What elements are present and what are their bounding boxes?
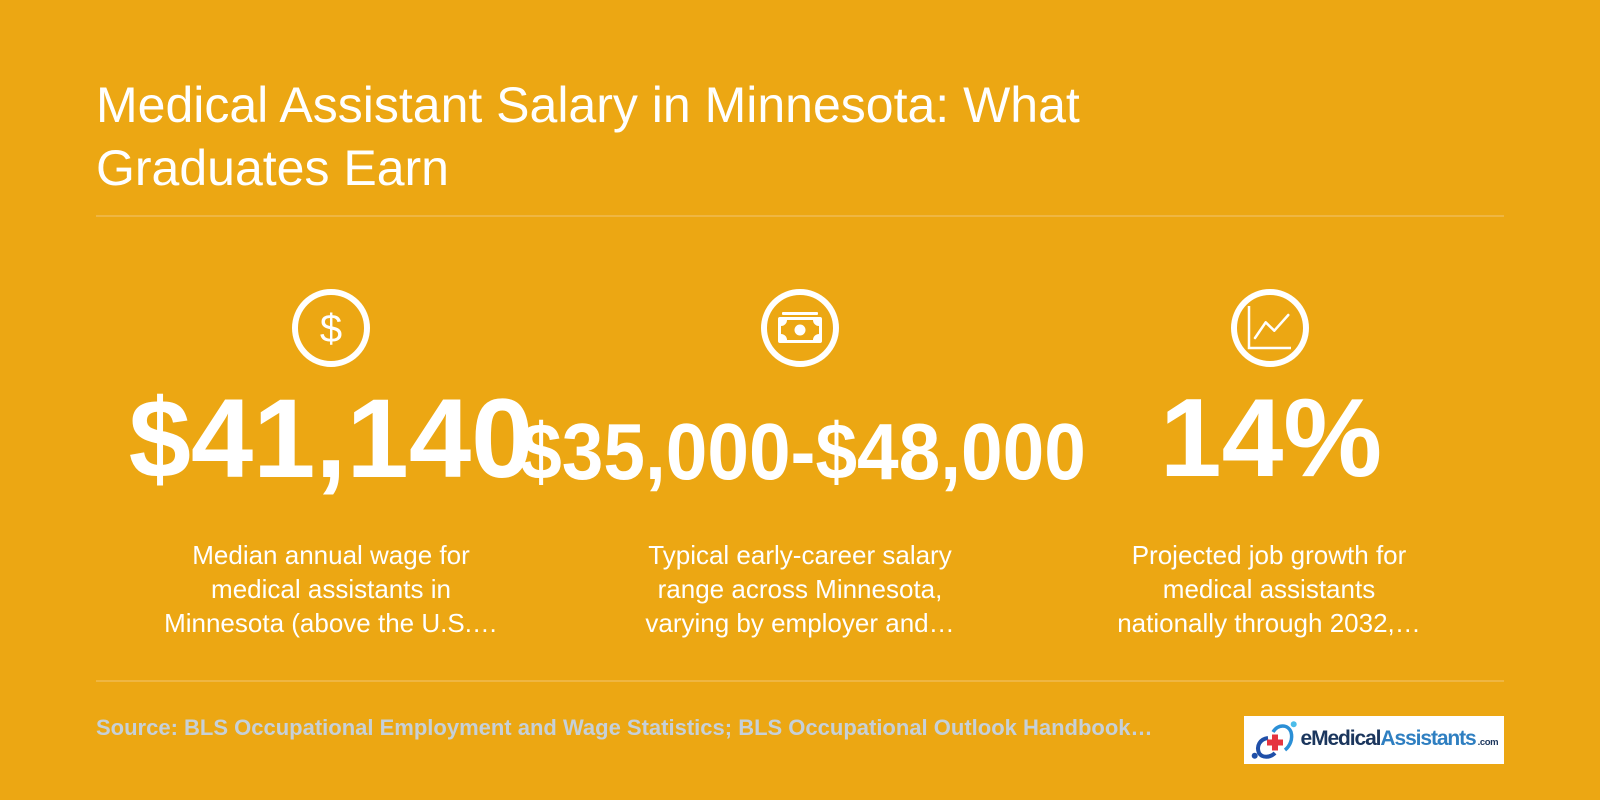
icon: dollar coin: $ [320, 307, 342, 351]
logo mark [1252, 721, 1297, 759]
icon: dollar coin [292, 289, 370, 367]
icon: line chart [1231, 289, 1309, 367]
description: job growth: medical assistants [1163, 574, 1375, 604]
stat value: salary range: $35,000-$48,000 [520, 407, 1085, 496]
logo wordmark: eMedicalAssistants.com [1300, 727, 1498, 750]
title [96, 77, 1080, 196]
title: Medical Assistant Salary in Minnesota: What [96, 77, 1080, 133]
stat value: median wage: $41,140 [129, 376, 533, 501]
source note: Source: BLS Occupational Employment and Wage Statistics; BLS Occupational Outlook Handbook… [96, 715, 1153, 740]
description: job growth: Projected job growth for [1132, 540, 1406, 570]
description: salary range: Typical early-career salary [648, 540, 952, 570]
logo: eMedicalAssistants.com [1244, 716, 1504, 764]
description: median wage: Minnesota (above the U.S.… [164, 608, 498, 638]
description: median wage [164, 540, 498, 638]
title: Graduates Earn [96, 140, 449, 196]
icon: banknote [761, 289, 839, 367]
description: salary range: range across Minnesota, [658, 574, 942, 604]
description: salary range: varying by employer and… [645, 608, 955, 638]
description: salary range [645, 540, 955, 638]
description: job growth: nationally through 2032,… [1117, 608, 1421, 638]
description: median wage: medical assistants in [211, 574, 451, 604]
description: job growth [1117, 540, 1421, 638]
stat value: job growth: 14% [1160, 376, 1382, 500]
description: median wage: Median annual wage for [192, 540, 470, 570]
